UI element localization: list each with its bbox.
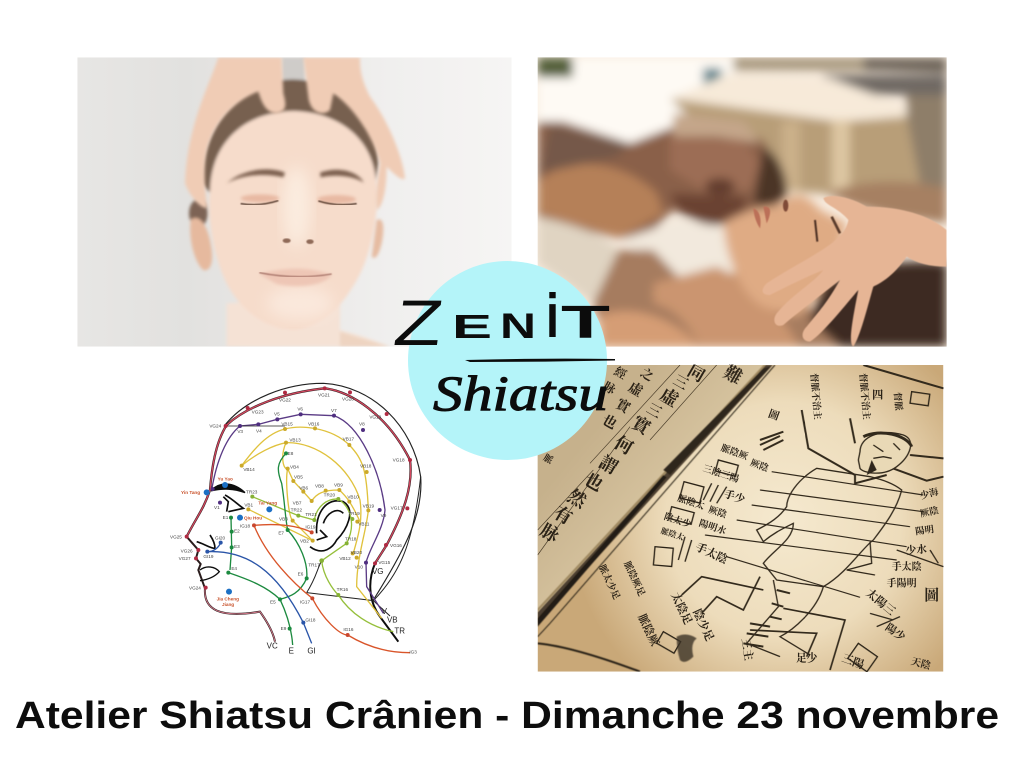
point labels: VB7	[293, 501, 302, 506]
point labels: IG16	[343, 627, 354, 632]
point labels: VG27	[179, 556, 191, 561]
point labels: VB17	[343, 437, 354, 442]
point labels: VB4	[290, 464, 299, 469]
point labels: VG24	[189, 585, 201, 590]
point labels: V4	[256, 429, 262, 434]
left page characters: 脉	[536, 517, 564, 548]
light green meridian	[252, 497, 393, 632]
point labels: VG	[372, 567, 384, 576]
point labels: VB8	[315, 484, 324, 489]
point labels: V6	[297, 407, 303, 412]
page characters and labels: 少海	[918, 483, 940, 502]
diagram frames	[653, 392, 930, 672]
point labels: TR22	[291, 508, 302, 513]
page characters and labels: 圖	[766, 406, 782, 424]
page characters and labels: 四	[872, 386, 883, 402]
page characters and labels: 圖	[924, 584, 939, 605]
left page characters: 虛	[656, 381, 684, 412]
page characters and labels: 手太陰	[693, 539, 731, 568]
page characters and labels: 手太陰	[892, 559, 923, 573]
point labels: VG22	[279, 398, 291, 403]
page characters and labels: 脈陰厥	[719, 440, 751, 463]
left page characters: 實	[612, 394, 635, 418]
meridian points	[185, 386, 412, 637]
left page characters: 脈	[541, 450, 557, 467]
page characters and labels: 督脈不治主	[857, 372, 875, 421]
logo: Zenit wordmark: i	[546, 282, 559, 351]
photo: antique Chinese acupuncture book	[536, 358, 943, 673]
left page characters: 經	[611, 362, 630, 383]
point labels: VB	[387, 616, 398, 625]
blue meridian	[207, 543, 312, 643]
page characters and labels: 督脈不治主	[808, 372, 826, 421]
title: Atelier Shiatsu Crânien - Dimanche 23 novembre	[15, 695, 999, 737]
point labels: E4	[231, 566, 237, 571]
point labels: V	[382, 607, 388, 616]
point labels: IG3	[409, 650, 417, 655]
point labels: E5	[270, 599, 276, 604]
point labels: VB5	[294, 475, 303, 480]
point labels: VB20	[351, 550, 362, 555]
point labels: E1	[223, 515, 229, 520]
page characters and labels: 三陽	[840, 650, 867, 673]
point labels: E6	[298, 572, 304, 577]
point labels: Yin Tang	[181, 490, 200, 495]
point labels: TR16	[337, 587, 348, 592]
point labels: VB6	[299, 485, 309, 490]
point labels: GI	[307, 646, 316, 655]
point labels: VC	[267, 642, 278, 651]
left page characters: 何	[610, 429, 638, 460]
book spine	[538, 365, 775, 672]
point labels: VB13	[289, 437, 301, 442]
left page	[538, 365, 763, 613]
column rules on left page	[538, 365, 717, 555]
page characters and labels: 足少	[796, 651, 819, 666]
point labels: Jiang	[222, 602, 234, 607]
head outlines	[187, 383, 421, 653]
point labels: E2	[234, 529, 240, 534]
point labels: V9	[381, 513, 387, 518]
point labels: V10	[355, 564, 363, 569]
point labels: VB1	[244, 502, 254, 507]
point labels: E9	[281, 626, 287, 631]
point labels: VB12	[339, 556, 351, 561]
point labels: GI19	[203, 554, 214, 559]
page characters and labels: 陰太少	[662, 509, 694, 531]
point labels: TR19	[348, 511, 360, 516]
point labels: VB11	[358, 521, 370, 526]
point labels: Qiu Hou	[244, 515, 262, 520]
green meridian	[228, 453, 307, 645]
point labels: Tai Yang	[258, 501, 277, 506]
logo: Zenit wordmark: N	[500, 307, 536, 346]
page characters and labels: 脈陰太	[659, 525, 686, 543]
point labels: E	[289, 646, 294, 655]
logo: Zenit wordmark: Z	[390, 287, 447, 359]
point labels: VB19	[363, 503, 374, 508]
point labels: VG25	[170, 534, 182, 539]
logo circle	[408, 261, 607, 460]
point labels: E7	[278, 530, 284, 535]
page characters and labels: 厥陰	[919, 502, 940, 520]
page characters and labels: 太陽三	[863, 585, 900, 619]
point labels: E8	[288, 451, 294, 456]
right page	[538, 365, 943, 672]
photo: woman receiving head massage	[77, 57, 512, 347]
point labels: GI20	[215, 535, 226, 540]
left page characters: 脉	[600, 377, 619, 398]
orange meridian	[254, 525, 410, 653]
point labels: IG19	[305, 524, 316, 529]
point labels: VB10	[347, 494, 359, 499]
point labels: Yu Yao	[218, 477, 233, 482]
left page characters: 實	[627, 409, 658, 441]
point labels: VG19	[369, 415, 382, 420]
logo divider line	[465, 359, 615, 362]
page characters and labels: 天陰	[910, 653, 933, 672]
point labels: IG17	[300, 599, 311, 604]
page characters and labels: 脈陰厥足	[621, 558, 650, 599]
point labels: Jia Cheng	[217, 597, 239, 602]
meridian head diagram	[170, 383, 421, 655]
point labels: VG24	[209, 423, 222, 428]
left page characters: 之	[638, 362, 658, 385]
page characters and labels: 督脈	[891, 391, 907, 412]
point labels: VG17	[391, 505, 403, 510]
point labels: E3	[234, 544, 240, 549]
point labels: V3	[237, 429, 243, 434]
point labels: TR21	[305, 512, 317, 517]
point labels: VG16	[390, 543, 402, 548]
yellow meridian	[242, 427, 382, 618]
ink stain	[677, 635, 697, 662]
left page characters	[538, 364, 744, 542]
point labels: TR17	[308, 562, 320, 567]
left page characters: 同	[684, 358, 710, 387]
point labels: VG23	[252, 409, 264, 414]
left page characters: 然	[563, 482, 593, 514]
logo: Zenit wordmark: E	[452, 308, 492, 345]
point labels: V7	[331, 408, 337, 413]
figure lines	[682, 365, 943, 670]
point labels: VG21	[318, 393, 330, 398]
logo: Shiatsu script: Shiatsu	[433, 365, 608, 421]
point labels	[170, 393, 417, 655]
page characters and labels: 陽明	[914, 521, 935, 538]
man	[538, 118, 787, 238]
figure head details	[867, 460, 877, 475]
page characters and labels: 陰少足	[689, 606, 718, 644]
left page characters: 三	[643, 397, 666, 423]
sheet	[620, 220, 743, 277]
logo: Zenit wordmark: T	[561, 296, 610, 348]
page characters and labels: 脈陰厥	[634, 611, 663, 649]
page characters and labels	[596, 372, 940, 673]
point labels: VB2	[300, 538, 309, 543]
page characters and labels: 厥陰	[707, 502, 730, 521]
point labels: VB9	[334, 483, 343, 488]
photo: couple massage in spa	[538, 57, 947, 347]
point labels: V1	[214, 505, 220, 510]
left page characters: 三	[669, 369, 693, 395]
point labels: TR23	[246, 489, 258, 494]
page characters and labels: 太陰足	[668, 590, 696, 627]
point labels: VG20	[342, 397, 354, 402]
point labels: TR18	[345, 536, 357, 541]
point labels: VB14	[243, 467, 255, 472]
page characters and labels: 少水	[905, 541, 928, 558]
point labels: VB18	[360, 464, 372, 469]
page characters and labels: 厥陰	[749, 455, 771, 475]
towel	[538, 217, 618, 303]
point labels: VG15	[378, 560, 391, 565]
page characters and labels: 陽少	[882, 620, 909, 645]
point labels: V5	[274, 411, 280, 416]
point labels: V8	[359, 421, 365, 426]
point labels: TR	[394, 626, 405, 635]
point labels: VG18	[393, 458, 405, 463]
left page characters: 虛	[625, 377, 647, 401]
left page characters: 也	[599, 410, 621, 434]
left page characters: 也	[580, 466, 608, 497]
page characters and labels: 脈太少足	[596, 562, 625, 602]
point labels: IG18	[240, 523, 251, 528]
point labels: VB3	[279, 517, 288, 522]
point labels: VG26	[181, 548, 193, 553]
left page characters: 有	[549, 499, 578, 530]
page characters and labels: 手陽明	[887, 576, 917, 590]
point labels: GI18	[305, 618, 316, 623]
woman body	[593, 250, 863, 347]
logo: Zenit wordmark	[390, 282, 610, 359]
left page characters: 謂	[595, 448, 623, 480]
purple meridian	[212, 414, 385, 613]
page characters and labels: 脈陰太	[676, 490, 707, 512]
page characters and labels: 陽明水	[697, 515, 729, 537]
point labels: TR20	[324, 493, 335, 498]
point labels: VB16	[308, 421, 320, 426]
page characters and labels: 手少	[722, 486, 748, 508]
left page characters: 難	[719, 358, 748, 390]
page characters and labels: 三陰三陽	[701, 460, 742, 485]
page characters and labels: 三主	[737, 637, 757, 662]
point labels: VB15	[281, 421, 293, 426]
